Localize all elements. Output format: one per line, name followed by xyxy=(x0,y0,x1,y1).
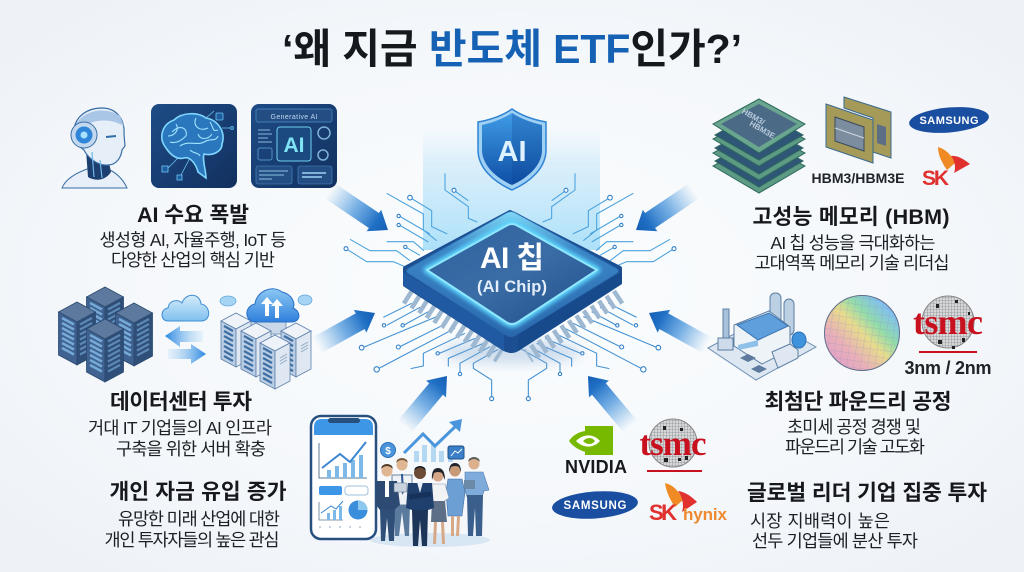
text block xyxy=(88,418,272,459)
logo: Samsung: SAMSUNG xyxy=(920,115,978,127)
logo: tsmc: tsmc xyxy=(640,424,706,463)
text block xyxy=(100,230,286,270)
heading: 데이터센터 투자 xyxy=(110,390,252,414)
text block: 선두 기업들에 분산 투자 xyxy=(752,531,918,551)
icon: rising trend arrow chart: $ xyxy=(385,446,391,457)
icon: factory xyxy=(708,293,816,380)
label: HBM3/HBM3E xyxy=(812,170,904,186)
chip pins xyxy=(406,296,620,356)
text block: 생성형 AI, 자율주행, IoT 등 xyxy=(100,230,286,250)
text block: 시장 지배력이 높은 xyxy=(750,511,890,531)
icon: right arrow xyxy=(168,344,206,364)
text block: 개인 투자자들의 높은 관심 xyxy=(104,530,280,550)
person 4 xyxy=(428,468,449,544)
illustration: group of investors xyxy=(370,457,490,547)
person 1 xyxy=(376,464,407,541)
text block xyxy=(750,511,918,551)
heading: 글로벌 리더 기업 집중 투자 xyxy=(747,481,987,505)
logo: SK xyxy=(922,147,970,190)
icon: small cloud xyxy=(162,295,209,321)
text block: 거대 IT 기업들의 AI 인프라 xyxy=(88,418,272,438)
logo: SK hynix: SK xyxy=(649,500,677,525)
panel: foundry process xyxy=(708,293,992,457)
logo: Samsung xyxy=(908,104,990,136)
arrow: bottom right xyxy=(578,368,640,435)
chip glow ring xyxy=(427,224,597,324)
text block: 유망한 미래 산업에 대한 xyxy=(118,509,280,529)
logo: SK: SK xyxy=(922,167,949,190)
heading: 고성능 메모리 (HBM) xyxy=(752,205,950,229)
icon: phone with charts xyxy=(311,416,376,539)
icon: generative AI tile: AI xyxy=(284,134,304,157)
logo: SK hynix xyxy=(649,483,728,525)
text block: 고대역폭 메모리 기술 리더십 xyxy=(754,253,950,273)
panel: high performance memory xyxy=(713,97,990,273)
panel: AI demand xyxy=(62,104,337,270)
heading: 최첨단 파운드리 공정 xyxy=(764,390,952,414)
panel: central AI chip xyxy=(344,109,676,401)
arrow: bottom left xyxy=(395,368,457,435)
icon: HBM memory stack: HBM3E xyxy=(748,119,777,141)
icon: AI shield xyxy=(478,109,546,190)
icon: dark server cluster xyxy=(58,287,152,382)
icon: rising trend arrow chart xyxy=(380,419,464,462)
text block: AI 칩 성능을 극대화하는 xyxy=(770,233,936,253)
arrow: top left xyxy=(323,180,395,241)
panel: central AI chip: (AI Chip) xyxy=(477,278,547,296)
logo: SK hynix: hynix xyxy=(683,505,728,524)
label: 3nm / 2nm xyxy=(904,358,992,378)
text block: 다양한 산업의 핵심 기반 xyxy=(111,250,275,270)
person 6 xyxy=(464,457,489,536)
text block xyxy=(785,417,925,457)
text block: 파운드리 기술 고도화 xyxy=(785,437,925,457)
icon: wafer xyxy=(824,296,900,370)
chip shadow xyxy=(442,340,582,364)
panel: data center investment xyxy=(58,287,312,459)
heading: AI 수요 폭발 xyxy=(137,203,249,227)
logo: Samsung xyxy=(551,489,639,521)
icon: left arrow xyxy=(165,326,203,347)
icon: AI shield: AI xyxy=(498,136,526,168)
logo: NVIDIA xyxy=(565,426,627,477)
light beam xyxy=(423,125,600,250)
person 5 xyxy=(446,463,465,536)
icon: robot head xyxy=(62,108,127,188)
icon: brain tile xyxy=(151,104,237,188)
circuit traces xyxy=(344,173,676,401)
text block xyxy=(754,233,950,273)
chip label: AI 칩 xyxy=(480,242,544,275)
icon: HBM chips xyxy=(826,97,891,163)
person 3 xyxy=(406,466,434,546)
logo: tsmc: tsmc xyxy=(913,302,983,342)
icon: generative AI tile xyxy=(251,104,337,188)
icon: generative AI tile: Generative AI xyxy=(270,114,318,121)
chip body xyxy=(405,212,620,351)
panel: global leaders xyxy=(551,419,987,551)
arrow: middle left xyxy=(311,302,381,356)
heading: 개인 자금 유입 증가 xyxy=(110,480,287,504)
icon: HBM memory stack: HBM3/ xyxy=(740,107,767,127)
arrow: top right xyxy=(629,180,701,241)
panel: retail investors xyxy=(104,416,490,550)
text block xyxy=(104,509,280,550)
title: ‘왜 지금 반도체 ETF인가?’ xyxy=(282,26,742,72)
arrow: middle right xyxy=(643,302,713,356)
icon: light server cluster with cloud xyxy=(220,289,312,389)
text block: 초미세 공정 경쟁 및 xyxy=(787,417,921,437)
logo: NVIDIA: NVIDIA xyxy=(565,457,627,477)
logo: Samsung: SAMSUNG xyxy=(564,500,627,512)
icon: HBM memory stack xyxy=(713,99,805,193)
person 2 xyxy=(392,458,412,536)
text block: 구축을 위한 서버 확충 xyxy=(116,439,266,459)
